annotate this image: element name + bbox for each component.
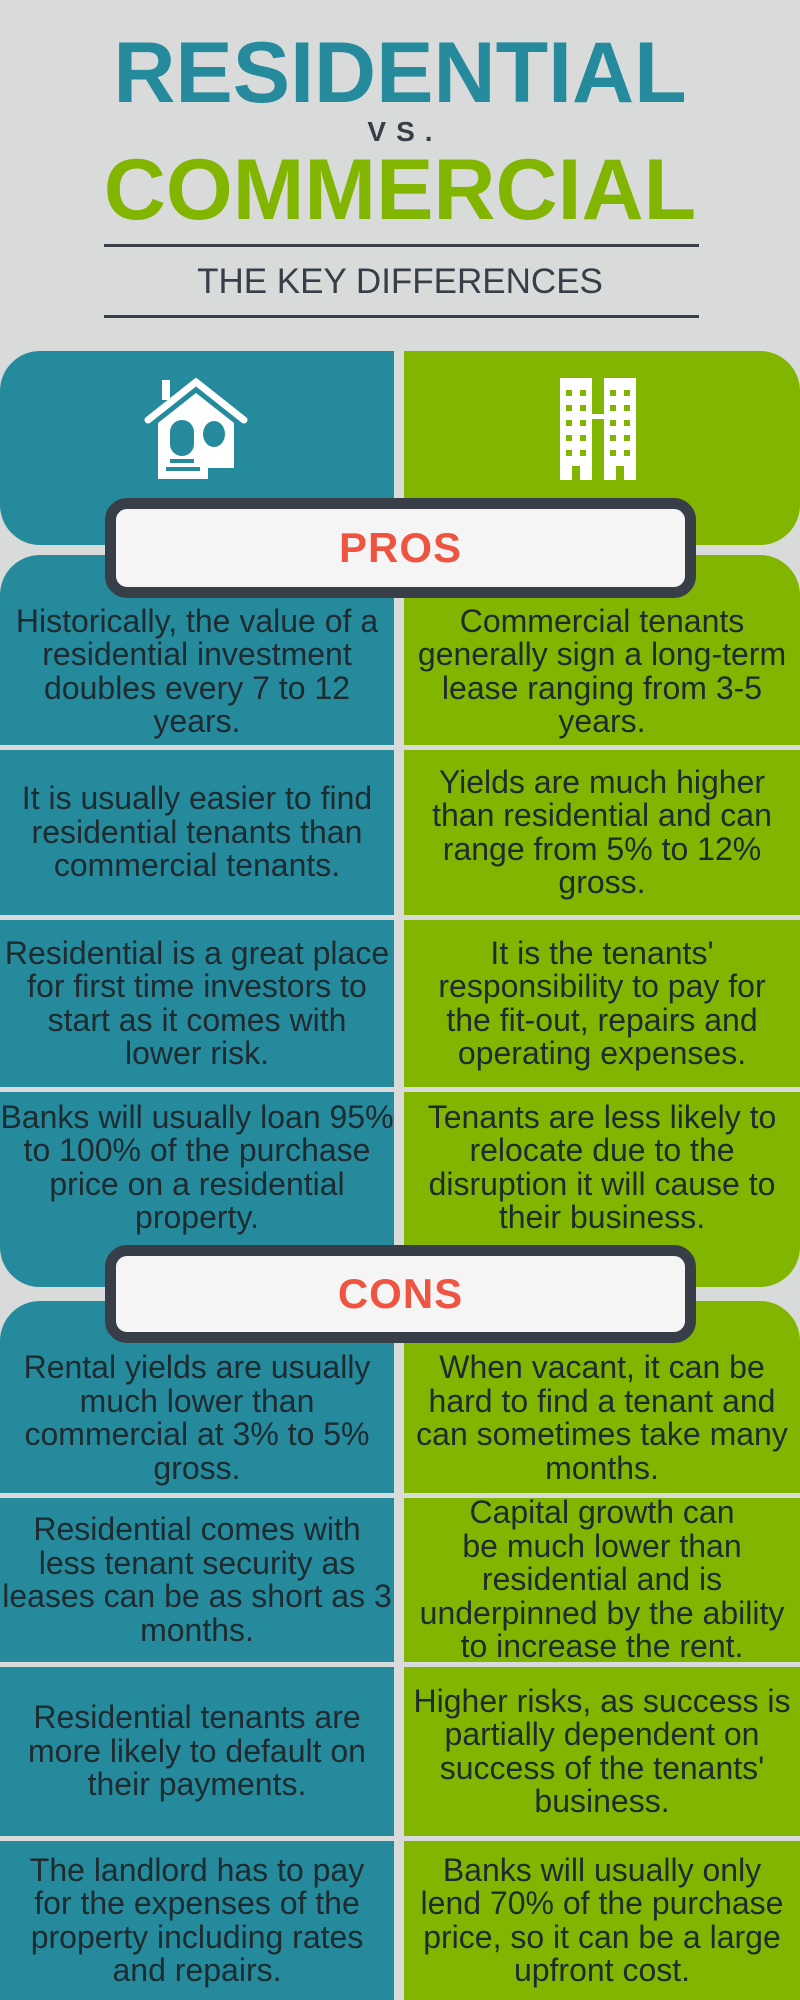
- cons: left row 1: [0, 1301, 394, 1493]
- cons: right row 3: [404, 1667, 800, 1836]
- cons: right row 4: lend 70% of the purchase: [421, 1885, 783, 1921]
- pros: left row 3: start as it comes with: [48, 1002, 346, 1038]
- title: commercial: COMMERCIAL: [104, 142, 696, 238]
- cons: right row 2: underpinned by the ability: [420, 1595, 784, 1631]
- title: residential: RESIDENTIAL: [113, 25, 687, 121]
- cons: right row 4: Banks will usually only: [443, 1852, 761, 1888]
- pros: right row 4: their business.: [499, 1199, 705, 1235]
- cons: left row 4: and repairs.: [112, 1952, 281, 1988]
- pros: right row 4: relocate due to the: [469, 1132, 735, 1168]
- cons: left row 2: months.: [140, 1612, 254, 1648]
- icon: buildings: [560, 378, 636, 480]
- cons: left row 2: less tenant security as: [39, 1544, 355, 1580]
- cons: left row 2: [0, 1498, 394, 1662]
- pros: right row 3: responsibility to pay for: [438, 968, 766, 1004]
- pros: left row 3: [0, 920, 394, 1087]
- cons: right row 1: [404, 1301, 800, 1493]
- cons: right row 1: months.: [545, 1450, 659, 1486]
- cons: right row 1: When vacant, it can be: [439, 1349, 765, 1385]
- cons: right row 3: Higher risks, as success is: [414, 1682, 790, 1718]
- pros: left row 4: Banks will usually loan 95%: [0, 1098, 394, 1134]
- pros: left row 4: [0, 1092, 394, 1287]
- pros: left row 1: years.: [153, 703, 241, 739]
- cons: right row 4: price, so it can be a large: [423, 1918, 781, 1954]
- pros label: [105, 498, 696, 598]
- pros: right row 4: Tenants are less likely to: [428, 1098, 776, 1134]
- pros: right row 3: [404, 920, 800, 1087]
- cons: right row 1: hard to find a tenant and: [429, 1382, 775, 1418]
- cons: left row 3: Residential tenants are: [33, 1699, 361, 1735]
- cons: left row 1: much lower than: [80, 1382, 314, 1418]
- pros: right row 2: range from 5% to 12%: [443, 830, 761, 866]
- cons: left row 2: Residential comes with: [33, 1511, 361, 1547]
- cons: right row 3: partially dependent on: [445, 1716, 759, 1752]
- pros: right row 4: disruption it will cause to: [429, 1166, 775, 1202]
- cons: left row 4: The landlord has to pay: [30, 1852, 364, 1888]
- cons: left row 4: [0, 1841, 394, 2000]
- cons: right row 2: Capital growth can: [469, 1494, 734, 1530]
- cons: left row 1: gross.: [153, 1450, 241, 1486]
- pros: left row 4: property.: [135, 1199, 259, 1235]
- pros: left row 3: Residential is a great place: [5, 934, 389, 970]
- cons: right row 2: to increase the rent.: [461, 1628, 743, 1664]
- pros: right row 1: [404, 555, 800, 745]
- pros: right row 2: than residential and can: [432, 797, 772, 833]
- cons label: CONS: [338, 1270, 463, 1317]
- cons: right row 2: be much lower than: [462, 1528, 742, 1564]
- panel: residential header: [0, 351, 394, 545]
- cons: left row 3: more likely to default on: [28, 1733, 366, 1769]
- pros: right row 3: It is the tenants': [490, 934, 714, 970]
- cons label: [105, 1245, 696, 1343]
- cons: right row 3: success of the tenants': [440, 1750, 764, 1786]
- pros: left row 1: doubles every 7 to 12: [44, 670, 350, 706]
- panel: commercial header: [404, 351, 800, 545]
- cons: right row 1: can sometimes take many: [416, 1416, 788, 1452]
- cons: left row 3: [0, 1667, 394, 1836]
- pros label: PROS: [339, 524, 462, 571]
- cons: right row 3: business.: [534, 1783, 670, 1819]
- cons: right row 2: [404, 1498, 800, 1662]
- title: vs.: VS.: [367, 116, 443, 147]
- subtitle: THE KEY DIFFERENCES: [197, 262, 603, 301]
- pros: right row 1: Commercial tenants: [460, 602, 744, 638]
- pros: left row 3: lower risk.: [125, 1035, 269, 1071]
- pros: left row 1: residential investment: [42, 636, 352, 672]
- pros: left row 2: commercial tenants.: [54, 847, 340, 883]
- pros: right row 3: the fit-out, repairs and: [446, 1002, 758, 1038]
- pros: left row 3: for first time investors to: [27, 968, 367, 1004]
- cons: left row 1: commercial at 3% to 5%: [24, 1416, 370, 1452]
- cons: right row 4: upfront cost.: [514, 1952, 690, 1988]
- pros: left row 4: price on a residential: [49, 1166, 345, 1202]
- pros: right row 1: generally sign a long-term: [418, 636, 786, 672]
- cons: right row 4: [404, 1841, 800, 2000]
- pros: right row 3: operating expenses.: [458, 1035, 746, 1071]
- pros: right row 4: [404, 1092, 800, 1287]
- pros: left row 2: [0, 750, 394, 915]
- pros: right row 2: [404, 750, 800, 915]
- pros: right row 2: gross.: [558, 864, 646, 900]
- cons: left row 1: Rental yields are usually: [24, 1349, 370, 1385]
- cons: left row 4: property including rates: [31, 1918, 363, 1954]
- cons: right row 2: residential and is: [482, 1561, 722, 1597]
- cons: left row 3: their payments.: [88, 1766, 306, 1802]
- pros: left row 4: to 100% of the purchase: [24, 1132, 370, 1168]
- pros: left row 1: Historically, the value of a: [16, 602, 378, 638]
- pros: left row 2: residential tenants than: [32, 814, 362, 850]
- pros: right row 2: Yields are much higher: [439, 764, 765, 800]
- cons: left row 4: for the expenses of the: [34, 1885, 360, 1921]
- pros: left row 2: It is usually easier to find: [22, 780, 372, 816]
- pros: right row 1: lease ranging from 3-5: [442, 670, 762, 706]
- cons: left row 2: leases can be as short as 3: [2, 1578, 392, 1614]
- pros: right row 1: years.: [558, 703, 646, 739]
- pros: left row 1: [0, 555, 394, 745]
- icon: house: [144, 378, 248, 479]
